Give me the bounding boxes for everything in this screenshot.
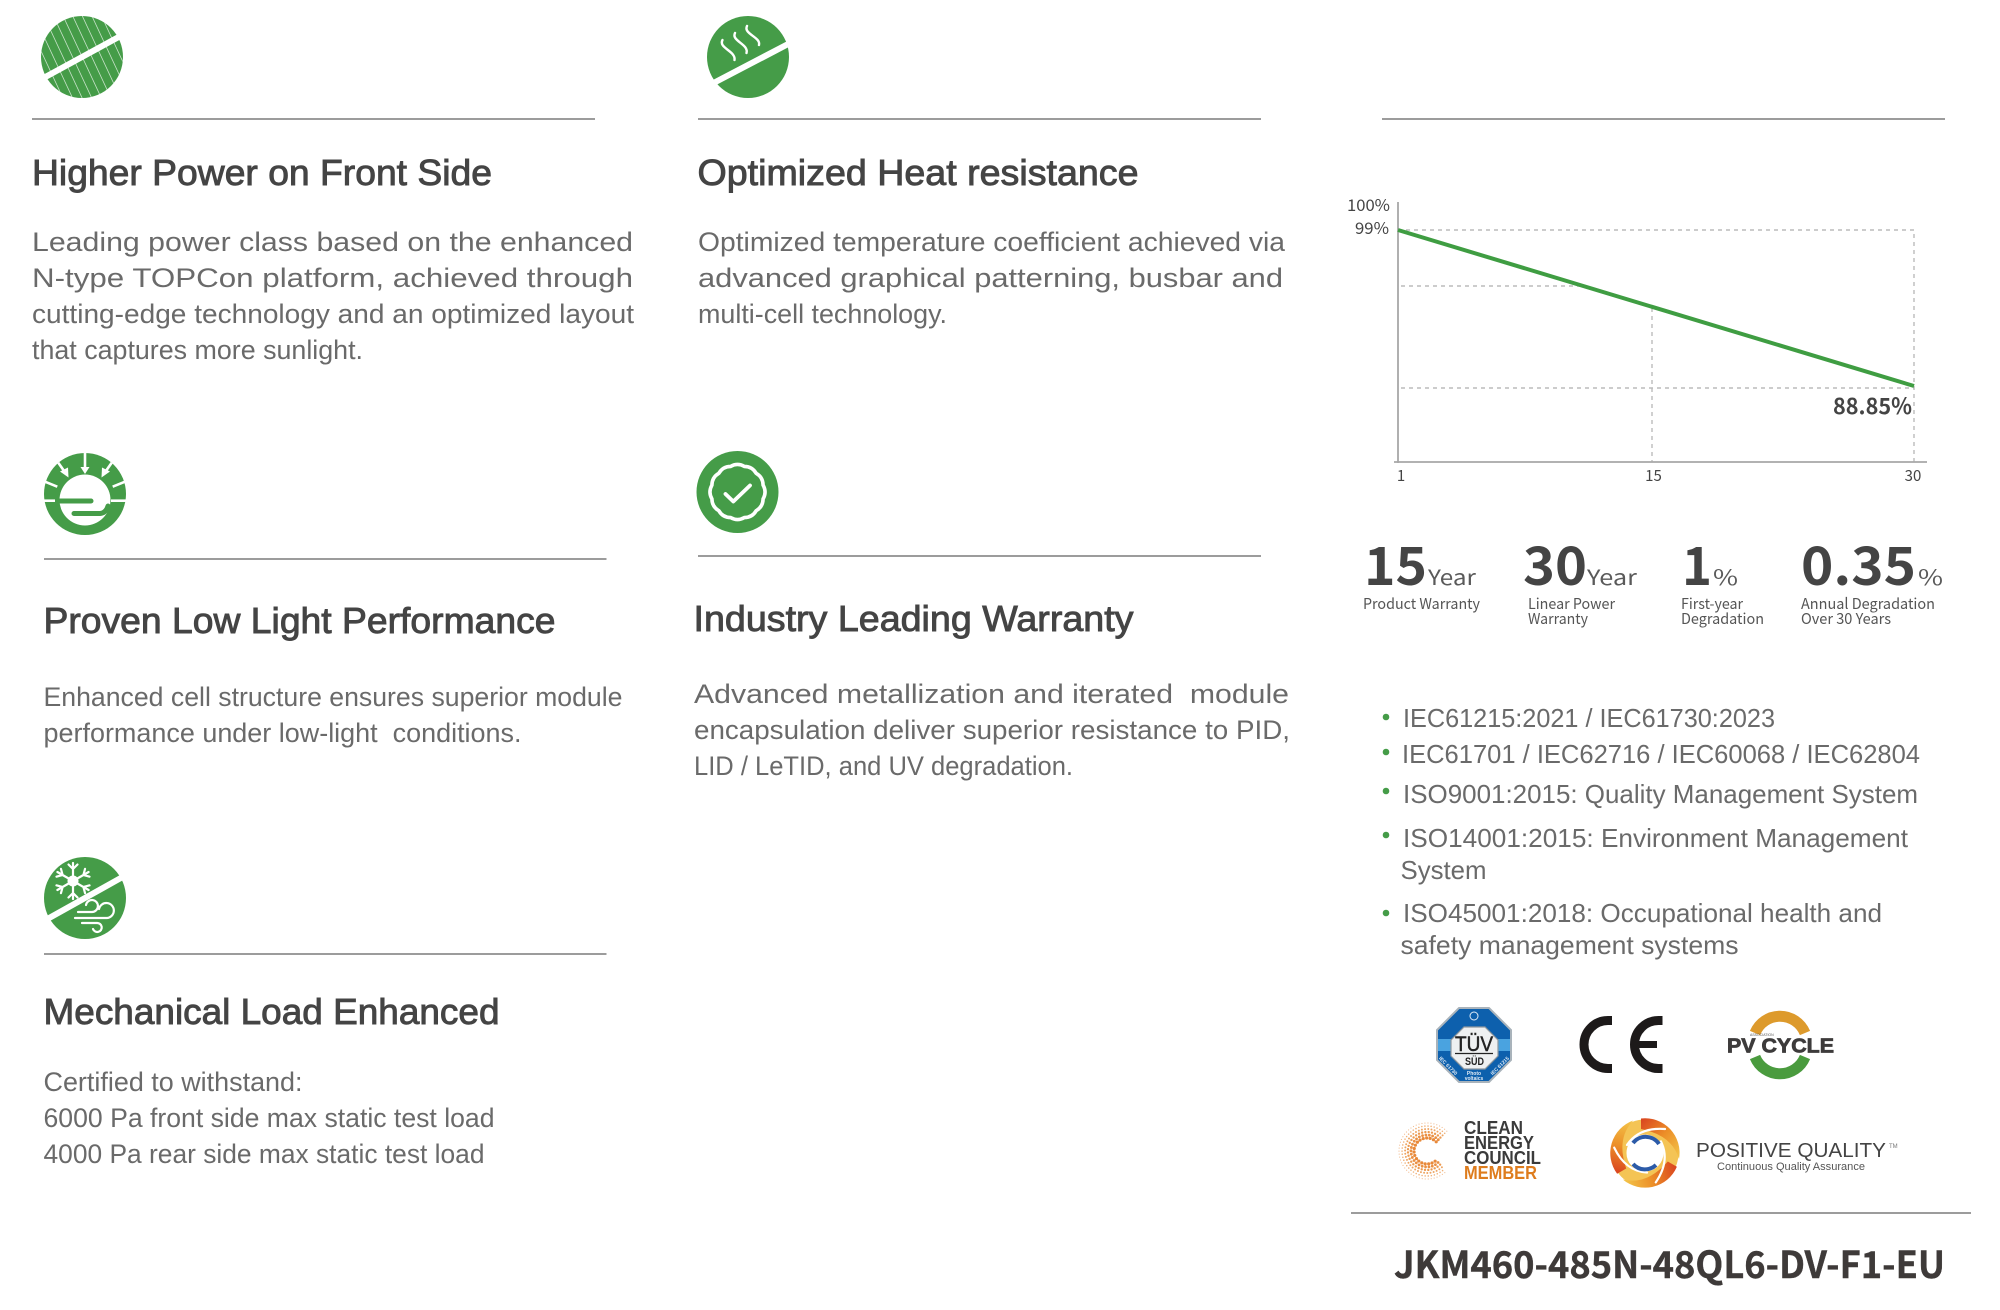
icon: solar cell: [41, 16, 123, 98]
panel: higher power on front side: [11, 0, 635, 365]
logo: Clean Energy Council member: CLEAN: [1464, 1118, 1523, 1138]
logo: PV CYCLE: PV CYCLE: [1727, 1034, 1834, 1058]
stat: 0.35 percent annual degradation: 0.35: [1801, 525, 1916, 601]
axis labels: 100%: [1347, 192, 1390, 216]
stat: 15 year product warranty: [1363, 525, 1480, 614]
icon: warranty badge: [696, 451, 778, 533]
line chart: power degradation: [1347, 192, 1927, 486]
axis labels: 1: [1397, 465, 1405, 486]
body text: Leading power class based on the enhanced: [32, 227, 633, 257]
body text: [44, 682, 622, 748]
body text: cutting-edge technology and an optimized layout: [32, 299, 635, 329]
panel: industry leading warranty: [694, 451, 1290, 781]
stat: 1 percent first-year degradation: 1: [1682, 525, 1712, 601]
certification list: IEC61701 / IEC62716 / IEC60068 / IEC62804: [1402, 739, 1920, 769]
logo: Clean Energy Council member: ENERGY: [1464, 1133, 1534, 1153]
certification list: IEC61215:2021 / IEC61730:2023: [1403, 703, 1775, 733]
panel: proven low light performance: [44, 453, 622, 748]
body text: multi-cell technology.: [698, 299, 947, 329]
logo: TUV SUD: Photo: [1467, 1071, 1481, 1077]
body text: [32, 227, 635, 365]
stat: 0.35 percent annual degradation: Over 30 Years: [1801, 608, 1891, 629]
certification list: ISO45001:2018: Occupational health and: [1403, 898, 1882, 928]
body text: Certified to withstand:: [44, 1067, 302, 1097]
stat: 1 percent first-year degradation: [1681, 525, 1764, 629]
heading: Mechanical Load Enhanced: [44, 991, 500, 1032]
stat: 15 year product warranty: 15: [1364, 525, 1427, 601]
stat: 15 year product warranty: Year: [1427, 562, 1477, 592]
logo: Clean Energy Council member: COUNCIL: [1464, 1148, 1541, 1168]
axis labels: 15: [1645, 465, 1662, 486]
body text: advanced graphical patterning, busbar and: [698, 263, 1283, 293]
heading: Proven Low Light Performance: [44, 600, 556, 641]
stat: 30 year linear power warranty: 30: [1523, 525, 1587, 601]
certification list: System: [1400, 855, 1486, 885]
logo: TUV SUD: SÜD: [1465, 1055, 1484, 1068]
stat: 30 year linear power warranty: Warranty: [1528, 608, 1588, 629]
panel: optimized heat resistance: [698, 16, 1286, 329]
logo: TUV SUD: TÜV: [1455, 1033, 1493, 1056]
logo: Clean Energy Council member: MEMBER: [1464, 1163, 1537, 1183]
stat: 0.35 percent annual degradation: Annual Degradation: [1801, 593, 1935, 614]
body text: encapsulation deliver superior resistance to PID,: [694, 715, 1290, 745]
axis labels: 30: [1905, 465, 1921, 486]
body text: 6000 Pa front side max static test load: [44, 1103, 494, 1133]
axis labels: [1347, 192, 1921, 486]
stat: 1 percent first-year degradation: First-year: [1681, 593, 1743, 614]
stat: 0.35 percent annual degradation: [1801, 525, 1943, 629]
heading: Higher Power on Front Side: [32, 152, 492, 193]
axis labels: 99%: [1355, 215, 1389, 239]
stat: 0.35 percent annual degradation: %: [1918, 562, 1943, 592]
certification list: ISO9001:2015: Quality Management System: [1403, 779, 1918, 809]
certification list: ISO14001:2015: Environment Management: [1403, 823, 1909, 853]
body text: 4000 Pa rear side max static test load: [44, 1139, 484, 1169]
body text: Optimized temperature coefficient achieved via: [698, 227, 1286, 257]
body text: performance under low-light conditions.: [44, 718, 522, 748]
logo: Positive Quality: [1598, 1118, 1898, 1200]
body text: that captures more sunlight.: [32, 335, 363, 365]
panel: mechanical load enhanced: [42, 857, 606, 1169]
logo: Clean Energy Council member: [1399, 1118, 1541, 1183]
logo: Positive Quality: TM: [1889, 1144, 1898, 1150]
body text: Advanced metallization and iterated module: [694, 679, 1289, 709]
body text: [44, 1067, 494, 1169]
stat: 30 year linear power warranty: [1523, 525, 1638, 629]
stat: 30 year linear power warranty: Linear Power: [1528, 593, 1615, 614]
logo: TUV SUD: IEC 61730: [1437, 1056, 1458, 1077]
body text: [694, 679, 1290, 781]
logo: TUV SUD: voltaics: [1465, 1076, 1484, 1082]
logo: Positive Quality: POSITIVE QUALITY: [1696, 1140, 1886, 1162]
logo: TUV SUD: IEC 61215: [1490, 1056, 1511, 1077]
power trend line: [1398, 230, 1914, 386]
model number: JKM460-485N-48QL6-DV-F1-EU: [1394, 1235, 1945, 1289]
body text: LID / LeTID, and UV degradation.: [694, 751, 1073, 781]
stat: 30 year linear power warranty: Year: [1586, 562, 1638, 592]
stat: 15 year product warranty: Product Warranty: [1363, 593, 1480, 614]
logo: CE mark: [1584, 1020, 1662, 1068]
icon: low light sun: [44, 453, 126, 535]
stat: 1 percent first-year degradation: %: [1713, 562, 1738, 592]
certification list: [1383, 703, 1920, 960]
certification list: safety management systems: [1400, 930, 1738, 960]
logo: TUV SUD: [1437, 1008, 1511, 1082]
body text: Enhanced cell structure ensures superior module: [44, 682, 622, 712]
icon: heat waves: [704, 16, 792, 98]
body text: [698, 227, 1286, 329]
logo: PV CYCLE: ASSOCIATION: [1750, 1033, 1774, 1037]
heading: Industry Leading Warranty: [694, 598, 1134, 639]
stat: 1 percent first-year degradation: Degradation: [1681, 608, 1764, 629]
body text: N-type TOPCon platform, achieved through: [32, 263, 633, 293]
heading: Optimized Heat resistance: [698, 152, 1138, 193]
end value label: 88.85%: [1833, 389, 1912, 421]
logo: Positive Quality: Continuous Quality Assurance: [1717, 1161, 1865, 1173]
logo: PV CYCLE: [1727, 1016, 1834, 1074]
icon: snow and wind: [42, 857, 128, 939]
